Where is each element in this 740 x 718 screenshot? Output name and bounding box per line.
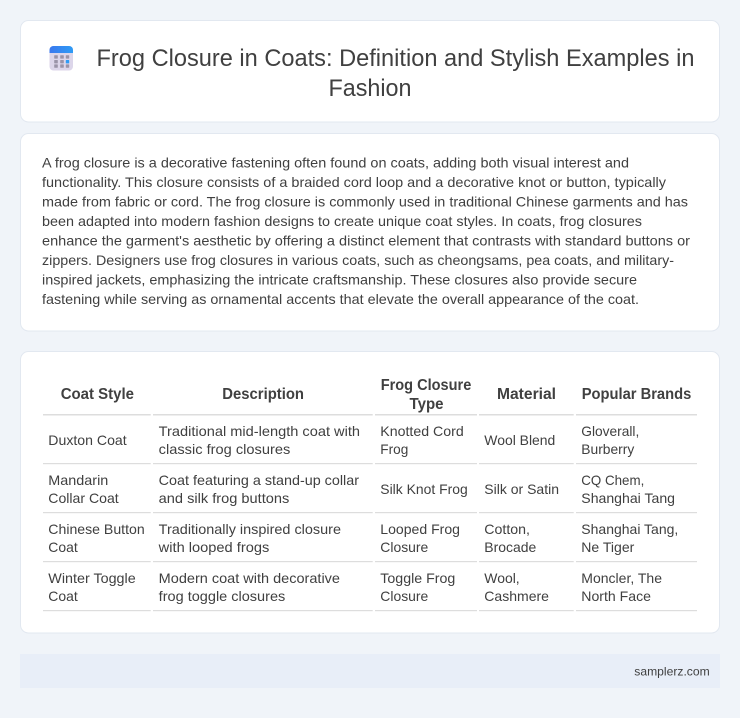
row: Mandarin Collar Coat: Shanghai Tang — [581, 490, 675, 506]
row: Mandarin Collar Coat: Silk Knot Frog — [380, 481, 468, 497]
paragraph: zippers. Designers use frog closures in various coats, such as cheongsams, pea coats, and military- — [42, 252, 674, 268]
row: Winter Toggle Coat: Closure — [380, 588, 429, 604]
row: Mandarin Collar Coat: Mandarin — [48, 472, 108, 488]
row: Winter Toggle Coat — [48, 570, 662, 604]
row: Duxton Coat — [48, 423, 639, 457]
paragraph: made from fabric or cord. The frog closure is commonly used in traditional Chinese garments and has — [42, 193, 688, 209]
row: Mandarin Collar Coat: CQ Chem, — [581, 472, 644, 488]
title: Frog Closure in Coats: Definition and Stylish Examples in — [96, 45, 694, 72]
paragraph: A frog closure is a decorative fastening often found on coats, adding both visual interest and — [42, 154, 629, 170]
row: Winter Toggle Coat: Wool, — [484, 570, 520, 586]
row: Duxton Coat: classic frog closures — [159, 441, 290, 457]
row: Duxton Coat: Duxton Coat — [48, 432, 127, 448]
paragraph: functionality. This closure consists of a braided cord loop and a decorative knot or button, typically — [42, 174, 666, 190]
title: Fashion — [328, 75, 412, 102]
row: Chinese Button Coat: Looped Frog — [380, 521, 460, 537]
row: Winter Toggle Coat: Cashmere — [484, 588, 549, 604]
paragraph: enhance the garment's aesthetic by offering a distinct element that contrasts with standard buttons or — [42, 232, 690, 248]
row: Duxton Coat: Frog — [380, 441, 408, 457]
row: Chinese Button Coat — [48, 521, 678, 555]
paragraph: inspired jackets, emphasizing the intricate craftsmanship. These closures also provide secure — [42, 271, 637, 287]
row: Winter Toggle Coat: Winter Toggle — [48, 570, 136, 586]
row: Winter Toggle Coat: Modern coat with decorative — [159, 570, 340, 586]
row: Duxton Coat: Traditional mid-length coat with — [159, 423, 360, 439]
row: Mandarin Collar Coat: Coat featuring a stand-up collar — [159, 472, 359, 488]
paragraph: been adapted into modern fashion designs to create unique coat styles. In coats, frog closures — [42, 213, 642, 229]
row: Duxton Coat: Wool Blend — [484, 432, 555, 448]
panel: coat style table — [20, 352, 720, 633]
row: Winter Toggle Coat: frog toggle closures — [159, 588, 285, 604]
title — [96, 45, 694, 102]
row: Winter Toggle Coat: North Face — [581, 588, 651, 604]
table header row: Description — [222, 386, 304, 403]
row: Winter Toggle Coat: Coat — [48, 588, 78, 604]
row: Mandarin Collar Coat: and silk frog buttons — [159, 490, 289, 506]
row: Chinese Button Coat: Cotton, — [484, 521, 530, 537]
table header row: Coat Style — [61, 386, 134, 403]
row: Chinese Button Coat: with looped frogs — [158, 539, 269, 555]
row: Mandarin Collar Coat: Collar Coat — [48, 490, 119, 506]
row: Winter Toggle Coat: Toggle Frog — [380, 570, 455, 586]
row: Duxton Coat: Knotted Cord — [380, 423, 464, 439]
row: Chinese Button Coat: Brocade — [484, 539, 537, 555]
row: Chinese Button Coat: Coat — [48, 539, 78, 555]
row: Chinese Button Coat: Chinese Button — [48, 521, 145, 537]
row: Duxton Coat: Burberry — [581, 441, 634, 457]
row: Mandarin Collar Coat: Silk or Satin — [484, 481, 559, 497]
table header row: Frog Closure — [381, 377, 471, 394]
table header row: Popular Brands — [582, 386, 691, 403]
row: Chinese Button Coat: Traditionally inspired closure — [159, 521, 341, 537]
row: Duxton Coat: Gloverall, — [581, 423, 639, 439]
row: Winter Toggle Coat: Moncler, The — [581, 570, 662, 586]
table header row: Type — [410, 396, 444, 413]
row: Chinese Button Coat: Ne Tiger — [581, 539, 635, 555]
row: Mandarin Collar Coat — [48, 472, 675, 506]
paragraph: fastening while serving as ornamental accents that elevate the overall appearance of the coat. — [42, 291, 639, 307]
row: Chinese Button Coat: Shanghai Tang, — [581, 521, 678, 537]
panel: title card — [20, 20, 720, 122]
footer source label: samplerz.com — [634, 664, 710, 678]
panel: introduction text — [20, 134, 720, 331]
icon: calendar — [50, 46, 73, 70]
paragraph — [42, 154, 690, 307]
table header row: Material — [497, 386, 556, 403]
footer — [20, 654, 720, 688]
table header row — [61, 377, 691, 413]
row: Chinese Button Coat: Closure — [380, 539, 429, 555]
